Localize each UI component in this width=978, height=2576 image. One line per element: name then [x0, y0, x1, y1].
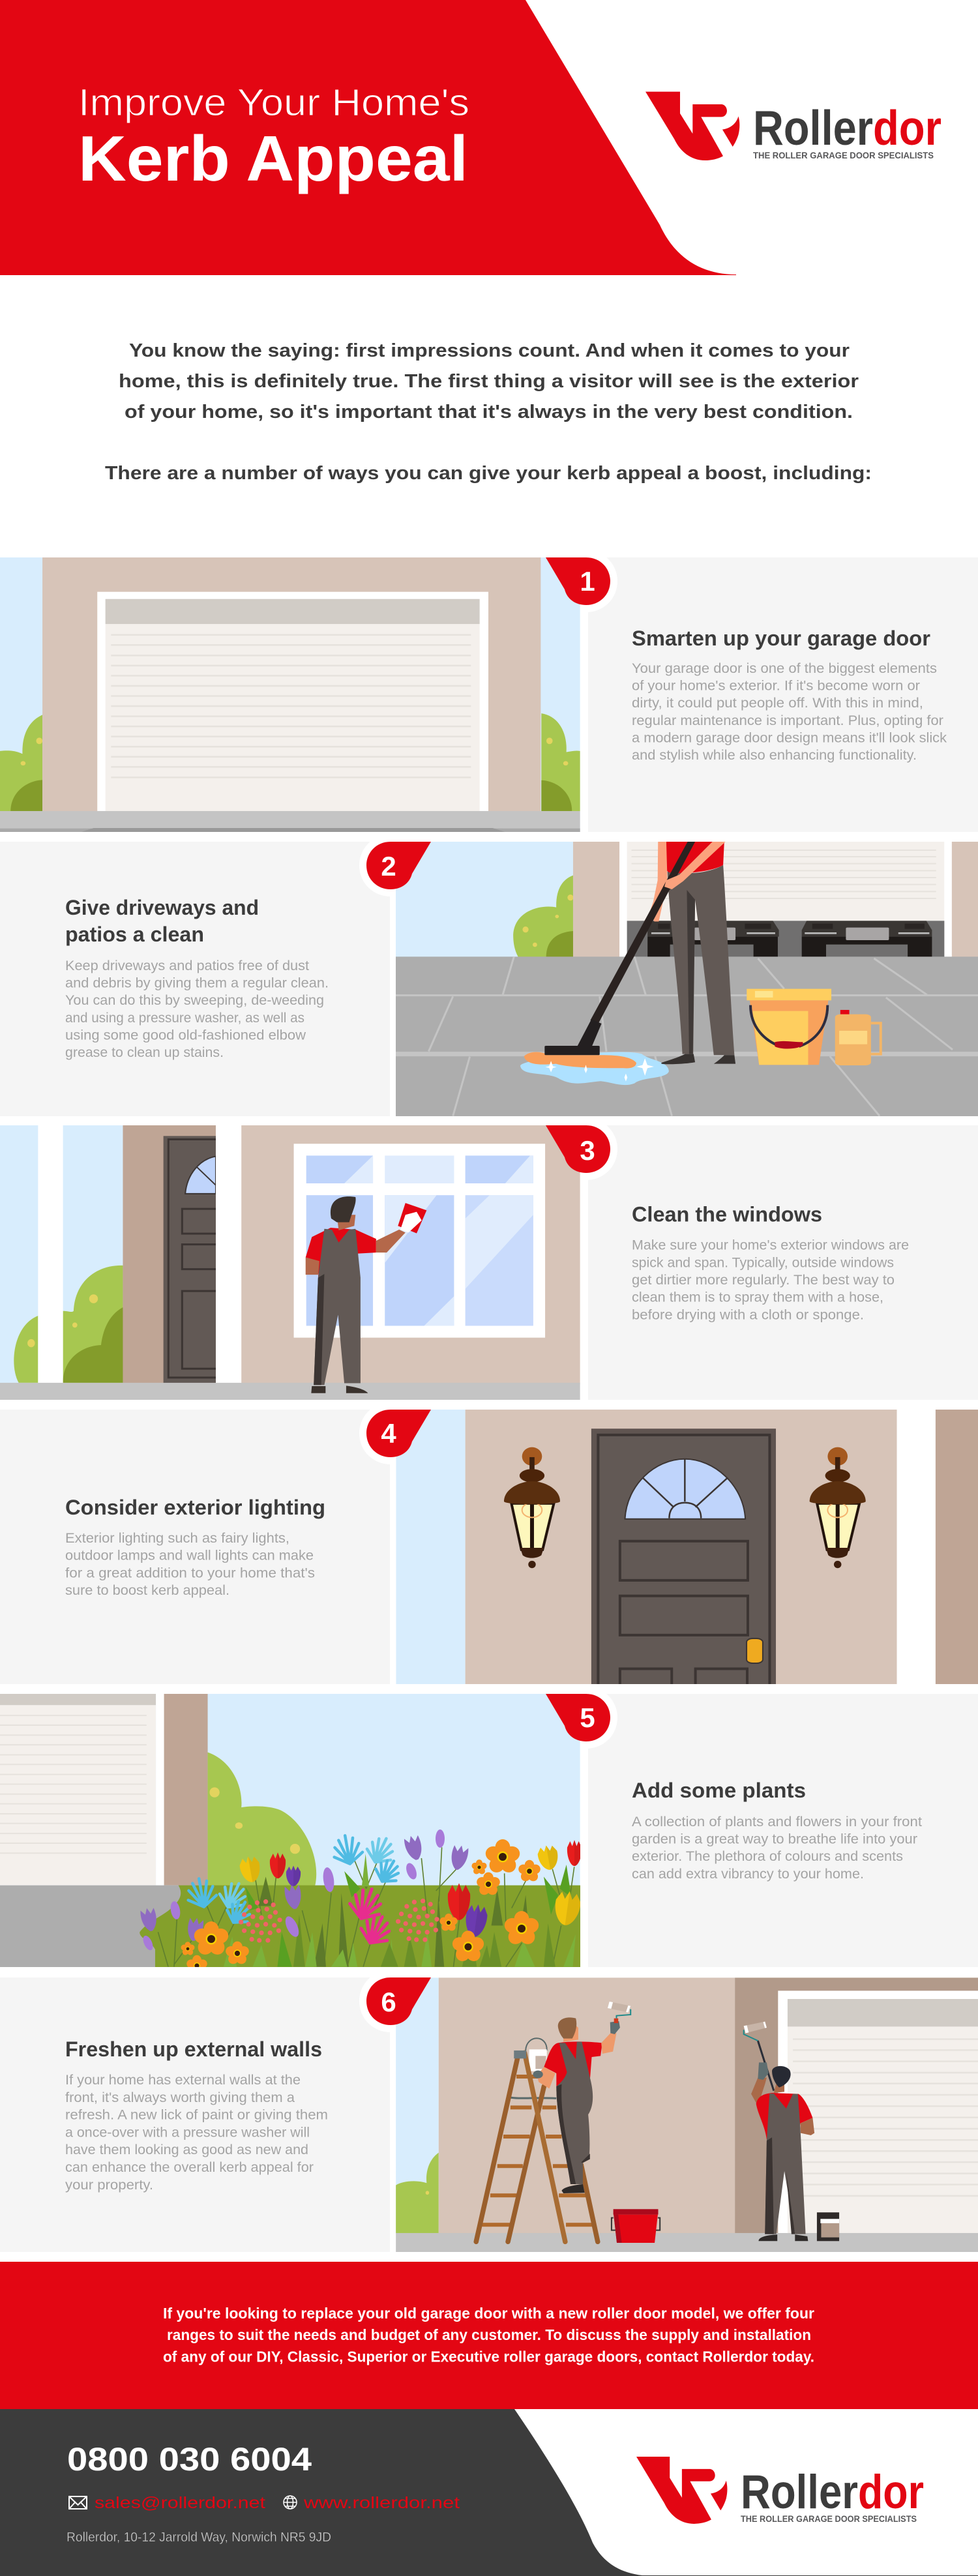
logo: Rollerdor: THE ROLLER GARAGE DOOR SPECIALISTS	[753, 151, 934, 160]
illustration: garage door	[0, 557, 580, 833]
icon: email	[69, 2496, 87, 2509]
number badge 2	[366, 842, 431, 889]
body text: and stylish while also enhancing functionality.	[632, 748, 917, 763]
body text: front, it's always worth giving them a	[65, 2090, 295, 2105]
icon: globe	[284, 2496, 297, 2509]
water	[520, 1052, 669, 1085]
address: Rollerdor, 10-12 Jarrold Way, Norwich NR5 9JD	[67, 2530, 331, 2545]
illustration: window cleaning	[0, 1125, 580, 1400]
text panel background	[588, 1125, 978, 1400]
white gutter	[580, 557, 588, 832]
number badge 3: 3	[580, 1135, 595, 1166]
body text	[632, 1814, 922, 1882]
mop cloth	[524, 1052, 636, 1069]
heading: patios a clean	[65, 923, 204, 946]
logo: Rollerdor: dor	[873, 100, 941, 155]
painter on ladder	[533, 2002, 630, 2193]
banner text: ranges to suit the needs and budget of any customer. To discuss the supply and installation	[167, 2326, 811, 2343]
white logo area	[514, 2409, 978, 2575]
badge halo	[366, 1410, 431, 1457]
number badge 4	[366, 1410, 431, 1457]
door	[591, 1429, 776, 1687]
footer logo: dor	[858, 2466, 924, 2519]
number badge 1	[546, 557, 610, 605]
body text: get dirtier more regularly. The best way to	[632, 1273, 895, 1288]
white gutter	[580, 1694, 588, 1967]
footer logo: THE ROLLER GARAGE DOOR SPECIALISTS	[741, 2514, 917, 2524]
footer logo: Roller	[741, 2466, 858, 2519]
red bucket	[612, 2209, 660, 2243]
body text	[65, 2073, 328, 2193]
body text: before drying with a cloth or sponge.	[632, 1307, 864, 1322]
white gutter	[580, 1125, 588, 1400]
panel: step 1 garage door	[0, 557, 978, 833]
footer	[0, 2409, 978, 2576]
bottle	[840, 1010, 850, 1014]
number badge 5	[546, 1694, 610, 1741]
front arm	[664, 841, 726, 889]
illustration: painting walls	[396, 1977, 978, 2253]
mop head	[578, 1020, 601, 1046]
painter on floor	[744, 2022, 814, 2241]
text panel background	[0, 1977, 390, 2252]
badge halo	[366, 842, 431, 889]
body text	[65, 1531, 315, 1598]
body text: for a great addition to your home that's	[65, 1565, 315, 1580]
heading: Give driveways and	[65, 896, 259, 919]
body text: If your home has external walls at the	[65, 2073, 301, 2088]
panel: step 2 driveways	[0, 841, 978, 1118]
bucket	[750, 1000, 828, 1065]
mop handle	[590, 841, 696, 1022]
body text	[632, 661, 947, 763]
paint can on ladder	[526, 2038, 547, 2071]
sparkles	[545, 1058, 654, 1082]
body text: a once-over with a pressure washer will	[65, 2125, 310, 2140]
intro text	[105, 340, 872, 484]
body text: have them looking as good as new and	[65, 2142, 308, 2157]
heading: Consider exterior lighting	[65, 1496, 325, 1519]
number badge 3	[546, 1125, 610, 1173]
lamp left	[504, 1447, 560, 1568]
panel: step 6 walls	[0, 1977, 978, 2253]
body text: and using a pressure washer, as well as	[65, 1011, 304, 1026]
panel: step 5 plants	[0, 1694, 978, 1977]
leaf blades	[258, 1876, 529, 1967]
banner text	[163, 2305, 814, 2365]
flowers: fans	[185, 1833, 404, 1949]
text panel background	[0, 1410, 390, 1684]
shirt	[666, 841, 724, 873]
body text: A collection of plants and flowers in your front	[632, 1814, 922, 1829]
text panel background	[0, 842, 390, 1116]
panel: step 3 windows	[0, 1125, 978, 1400]
title	[78, 81, 469, 194]
text panel background	[588, 1694, 978, 1967]
logo: Rollerdor: Roller	[753, 100, 873, 155]
body text: of your home's exterior. If it's become worn or	[632, 679, 920, 694]
title: Improve Your Home's	[78, 81, 469, 124]
banner text: If you're looking to replace your old garage door with a new roller door model, we offer four	[163, 2305, 814, 2322]
intro text: There are a number of ways you can give your kerb appeal a boost, including:	[105, 463, 872, 484]
logo: Rollerdor	[645, 92, 941, 160]
number badge 6	[366, 1977, 431, 2025]
number badge 2: 2	[381, 851, 396, 881]
website: www.rollerdor.net	[303, 2494, 460, 2512]
text panel background	[588, 557, 978, 832]
red band	[0, 2262, 978, 2409]
body text: sure to boost kerb appeal.	[65, 1583, 230, 1598]
white gutter	[390, 1977, 396, 2252]
heading: Clean the windows	[632, 1202, 822, 1226]
body text: outdoor lamps and wall lights can make	[65, 1548, 314, 1563]
badge halo	[546, 1694, 610, 1741]
number badge 1: 1	[580, 566, 595, 597]
illustration: front door and lamps	[396, 1410, 978, 1691]
flowers: dot clusters	[239, 1899, 439, 1943]
call to action banner	[0, 2262, 978, 2409]
man cleaning window	[306, 1196, 426, 1393]
header banner	[0, 0, 941, 275]
title: Kerb Appeal	[78, 123, 468, 194]
white gutter	[390, 1410, 396, 1684]
body text: refresh. A new lick of paint or giving them	[65, 2108, 328, 2123]
lamp right	[810, 1447, 866, 1568]
body text: using some good old-fashioned elbow	[65, 1028, 306, 1043]
intro text: You know the saying: first impressions count. And when it comes to your	[129, 340, 850, 361]
garden bed	[140, 1886, 580, 1968]
stems	[158, 1847, 574, 1967]
body text: your property.	[65, 2178, 153, 2193]
heading: Freshen up external walls	[65, 2037, 322, 2061]
back arm	[649, 841, 668, 921]
email address: sales@rollerdor.net	[95, 2494, 265, 2512]
heading	[65, 896, 259, 946]
body text: You can do this by sweeping, de-weeding	[65, 993, 324, 1008]
body text: Exterior lighting such as fairy lights,	[65, 1531, 289, 1546]
illustration: cleaning the driveway	[396, 841, 978, 1118]
trousers	[668, 865, 734, 1055]
badge halo	[546, 557, 610, 605]
number badge 6: 6	[381, 1987, 396, 2017]
body text: dirty, it could put people off. With this in mind,	[632, 696, 923, 711]
body text	[632, 1238, 909, 1322]
dark footer background	[0, 2409, 978, 2576]
number badge 4: 4	[381, 1418, 396, 1449]
body text: Keep driveways and patios free of dust	[65, 958, 309, 973]
flowers: orange blooms	[180, 1839, 542, 1977]
body text: Make sure your home's exterior windows are	[632, 1238, 909, 1253]
red header shape	[0, 0, 736, 275]
body text: Your garage door is one of the biggest elements	[632, 661, 937, 676]
body text: clean them is to spray them with a hose,	[632, 1290, 883, 1305]
shoes	[661, 1054, 695, 1064]
body text: can enhance the overall kerb appeal for	[65, 2160, 314, 2175]
heading: Smarten up your garage door	[632, 627, 930, 650]
white gutter	[390, 842, 396, 1116]
body text: regular maintenance is important. Plus, opting for	[632, 713, 943, 728]
panel: step 4 lighting	[0, 1410, 978, 1691]
body text: and debris by giving them a regular clean.	[65, 976, 329, 991]
banner text: of any of our DIY, Classic, Superior or Executive roller garage doors, contact Rollerdor today.	[163, 2348, 814, 2365]
number badge 5: 5	[580, 1702, 595, 1733]
flowers: bells and buds	[140, 1829, 469, 1951]
window panes	[306, 1155, 373, 1183]
body text: grease to clean up stains.	[65, 1045, 224, 1060]
badge halo	[546, 1125, 610, 1173]
body text: a modern garage door design means it'll look slick	[632, 730, 947, 745]
paint tin	[817, 2212, 839, 2241]
ladder	[476, 2050, 598, 2242]
body text	[65, 958, 329, 1060]
body text: can add extra vibrancy to your home.	[632, 1867, 864, 1882]
heading: Add some plants	[632, 1779, 806, 1802]
badge halo	[366, 1977, 431, 2025]
flowers: tulips	[238, 1840, 582, 1938]
footer logo	[636, 2457, 924, 2524]
body text: garden is a great way to breathe life into your	[632, 1832, 917, 1847]
intro text: home, this is definitely true. The first thing a visitor will see is the exterior	[119, 371, 859, 392]
body text: spick and span. Typically, outside windows	[632, 1255, 894, 1270]
illustration: flower garden	[0, 1694, 582, 1977]
phone number: 0800 030 6004	[67, 2441, 312, 2478]
body text: exterior. The plethora of colours and scents	[632, 1849, 903, 1864]
intro text: of your home, so it's important that it's always in the very best condition.	[125, 402, 853, 422]
